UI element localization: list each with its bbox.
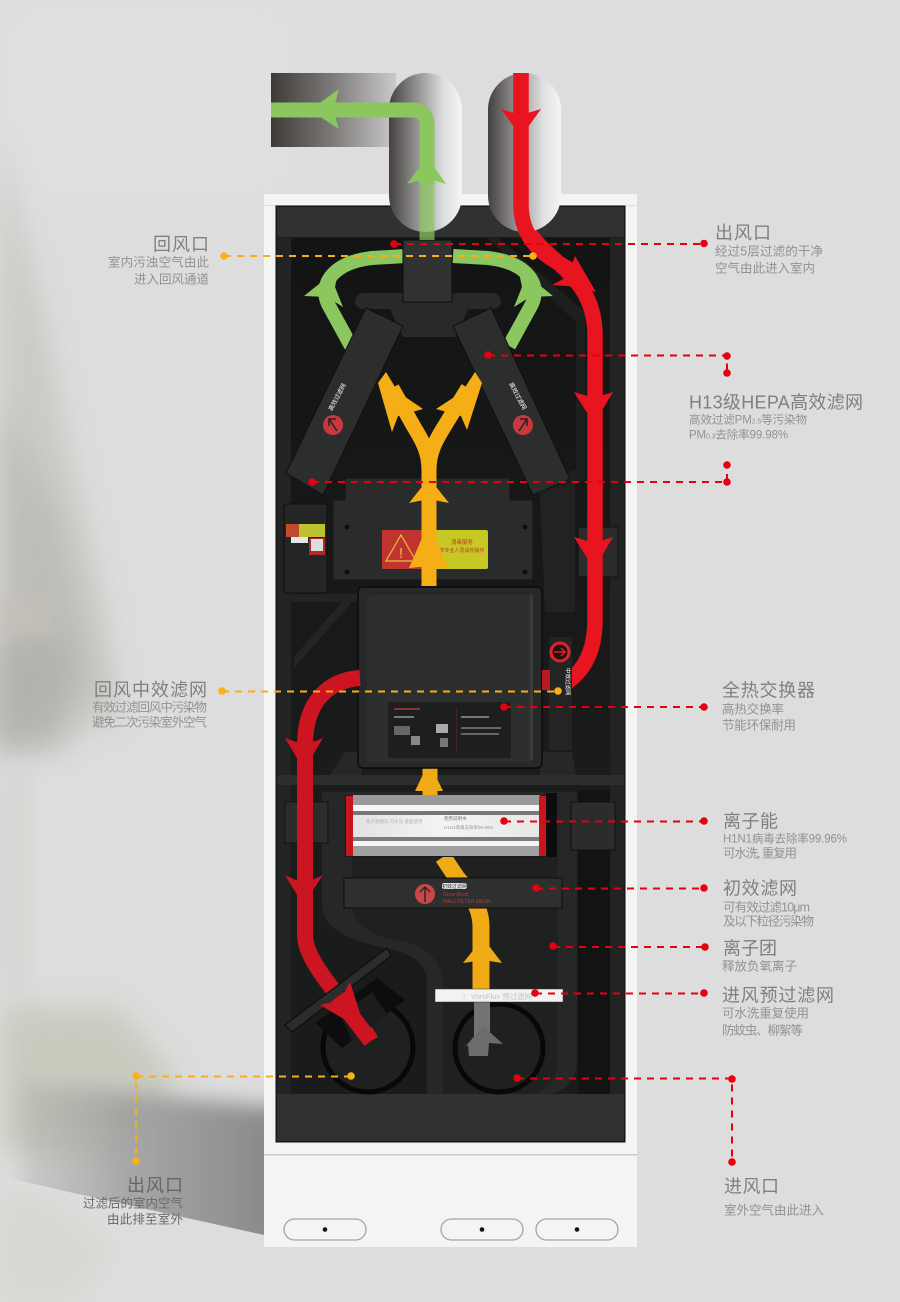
ion energy module: H1N1病毒去除率99.96% xyxy=(444,824,493,831)
callout line: air inlet xyxy=(513,1074,736,1166)
label: ion energy xyxy=(723,812,847,860)
plinth slot middle xyxy=(441,1219,523,1240)
central hub xyxy=(355,240,501,337)
ion energy module: 离子能模块 可水洗 重复使用 xyxy=(366,818,422,825)
label: return inlet: 室内污浊空气由此 xyxy=(108,254,209,270)
label: HEPA filter: PM0.3去除率99.98% xyxy=(689,428,788,442)
callout line: medium filter xyxy=(218,687,562,695)
label: supply outlet xyxy=(715,223,823,276)
label: medium filter: 避免二次污染室外空气 xyxy=(92,714,207,730)
label: air outlet: 由此排至室外 xyxy=(107,1212,183,1226)
label: heat exchanger: 节能环保耐用 xyxy=(722,718,796,732)
callout line: HEPA filter xyxy=(308,351,731,486)
intake orange lower arrow xyxy=(415,762,502,990)
label: return inlet: 回风口 xyxy=(153,234,209,254)
label: primary filter: 及以下粒径污染物 xyxy=(723,914,814,928)
warning label: 非专业人员请勿操作 xyxy=(439,547,485,554)
label: ion energy: H1N1病毒去除率99.96% xyxy=(723,832,847,846)
plinth slot left xyxy=(284,1219,366,1240)
primary filter: Grow Mesh xyxy=(443,892,469,898)
right inlet ring xyxy=(455,1004,543,1092)
supply air red top arrow xyxy=(501,73,578,275)
exhaust red arrow xyxy=(285,678,371,1041)
H13 HEPA filter right xyxy=(453,308,570,495)
heat exchanger core xyxy=(358,587,542,768)
cabinet body xyxy=(264,194,637,1247)
left controller module xyxy=(284,504,327,593)
exchanger filter tab xyxy=(542,637,572,750)
label: air inlet: 进风口 xyxy=(724,1176,779,1196)
label: HEPA filter: H13级HEPA高效滤网 xyxy=(689,392,863,412)
exhaust orange Y arrow xyxy=(378,372,482,586)
warning label: 消毒服务 xyxy=(451,538,473,546)
label: intake pre-filter: 防蚊虫、柳絮等 xyxy=(722,1022,803,1038)
label: ion energy: 离子能 xyxy=(723,812,778,832)
label: medium filter: 回风中效滤网 xyxy=(94,680,207,700)
callout line: supply outlet xyxy=(390,240,708,248)
supply duct capsule xyxy=(488,73,561,232)
label: primary filter: 初效滤网 xyxy=(723,878,797,898)
label: supply outlet: 经过5层过滤的干净 xyxy=(715,244,823,258)
label: air inlet: 室外空气由此进入 xyxy=(724,1202,824,1218)
label: air inlet xyxy=(724,1176,824,1218)
return duct capsule xyxy=(389,73,462,232)
primary filter xyxy=(344,878,562,908)
ion energy module: 使用说明书 xyxy=(444,815,467,822)
label: primary filter xyxy=(723,878,814,928)
label: return inlet: 进入回风通道 xyxy=(134,272,209,286)
label: intake pre-filter: 进风预过滤网 xyxy=(722,986,834,1006)
callout lines: right column components xyxy=(500,703,709,997)
label: supply outlet: 出风口 xyxy=(715,223,771,243)
exchanger filter tab: 中效过滤网 xyxy=(564,668,572,696)
return duct horizontal xyxy=(271,73,396,147)
cabinet dark interior xyxy=(276,206,625,1142)
label: air outlet xyxy=(83,1176,183,1226)
exhaust arrow tip xyxy=(320,982,371,1041)
primary filter: WALL FILTER MESH xyxy=(443,899,491,905)
label: medium filter xyxy=(92,680,207,730)
label: HEPA filter: 高效过滤PM2.5等污染物 xyxy=(689,412,807,426)
label: heat exchanger: 全热交换器 xyxy=(722,680,815,700)
label: supply outlet: 空气由此进入室内 xyxy=(715,260,815,276)
plinth slot right xyxy=(536,1219,618,1240)
label: primary filter: 可有效过滤10μm xyxy=(723,900,810,914)
callout line: return inlet xyxy=(220,252,537,260)
intake pre-filter xyxy=(435,989,563,1002)
label: heat exchanger xyxy=(722,680,815,732)
label: air outlet: 过滤后的室内空气 xyxy=(83,1196,183,1210)
label: heat exchanger: 高热交换率 xyxy=(722,702,784,716)
callout line: air outlet xyxy=(132,1072,355,1165)
label: intake pre-filter xyxy=(722,986,834,1038)
intake gray arrow xyxy=(465,1002,503,1056)
electronics module plate xyxy=(333,478,533,580)
label: ion cluster xyxy=(722,938,797,974)
intake pre-filter: ↑ xyxy=(462,992,466,1001)
label: ion cluster: 释放负氧离子 xyxy=(722,958,797,974)
warning label: ! xyxy=(399,545,403,562)
left outlet ring xyxy=(323,1002,413,1092)
exchanger spec label xyxy=(388,702,511,758)
label: air outlet: 出风口 xyxy=(127,1176,183,1196)
H13 HEPA filter left: 高效过滤网 xyxy=(327,382,348,412)
side bracket blocks xyxy=(285,527,618,850)
exhaust outlet housing xyxy=(285,948,405,1048)
primary filter: 初效过滤网 xyxy=(442,883,467,890)
return air green side arrows xyxy=(304,256,553,346)
label: HEPA filter xyxy=(689,392,863,442)
supply air red arrow xyxy=(501,73,613,683)
label: ion cluster: 离子团 xyxy=(723,938,777,958)
intake pre-filter: VortiFlux 预过滤网 xyxy=(471,991,532,1001)
label: medium filter: 有效过滤回风中污染物 xyxy=(92,700,207,714)
label: ion energy: 可水洗, 重复用 xyxy=(723,846,797,860)
label: intake pre-filter: 可水洗重复使用 xyxy=(722,1006,809,1020)
cabinet floor shadow xyxy=(18,1083,264,1235)
warning label xyxy=(382,530,488,569)
H13 HEPA filter right: 高效过滤网 xyxy=(507,381,528,411)
H13 HEPA filter left xyxy=(286,308,403,495)
ion energy module xyxy=(345,793,557,857)
label: return inlet xyxy=(108,234,209,286)
return air green top arrow xyxy=(271,89,446,240)
